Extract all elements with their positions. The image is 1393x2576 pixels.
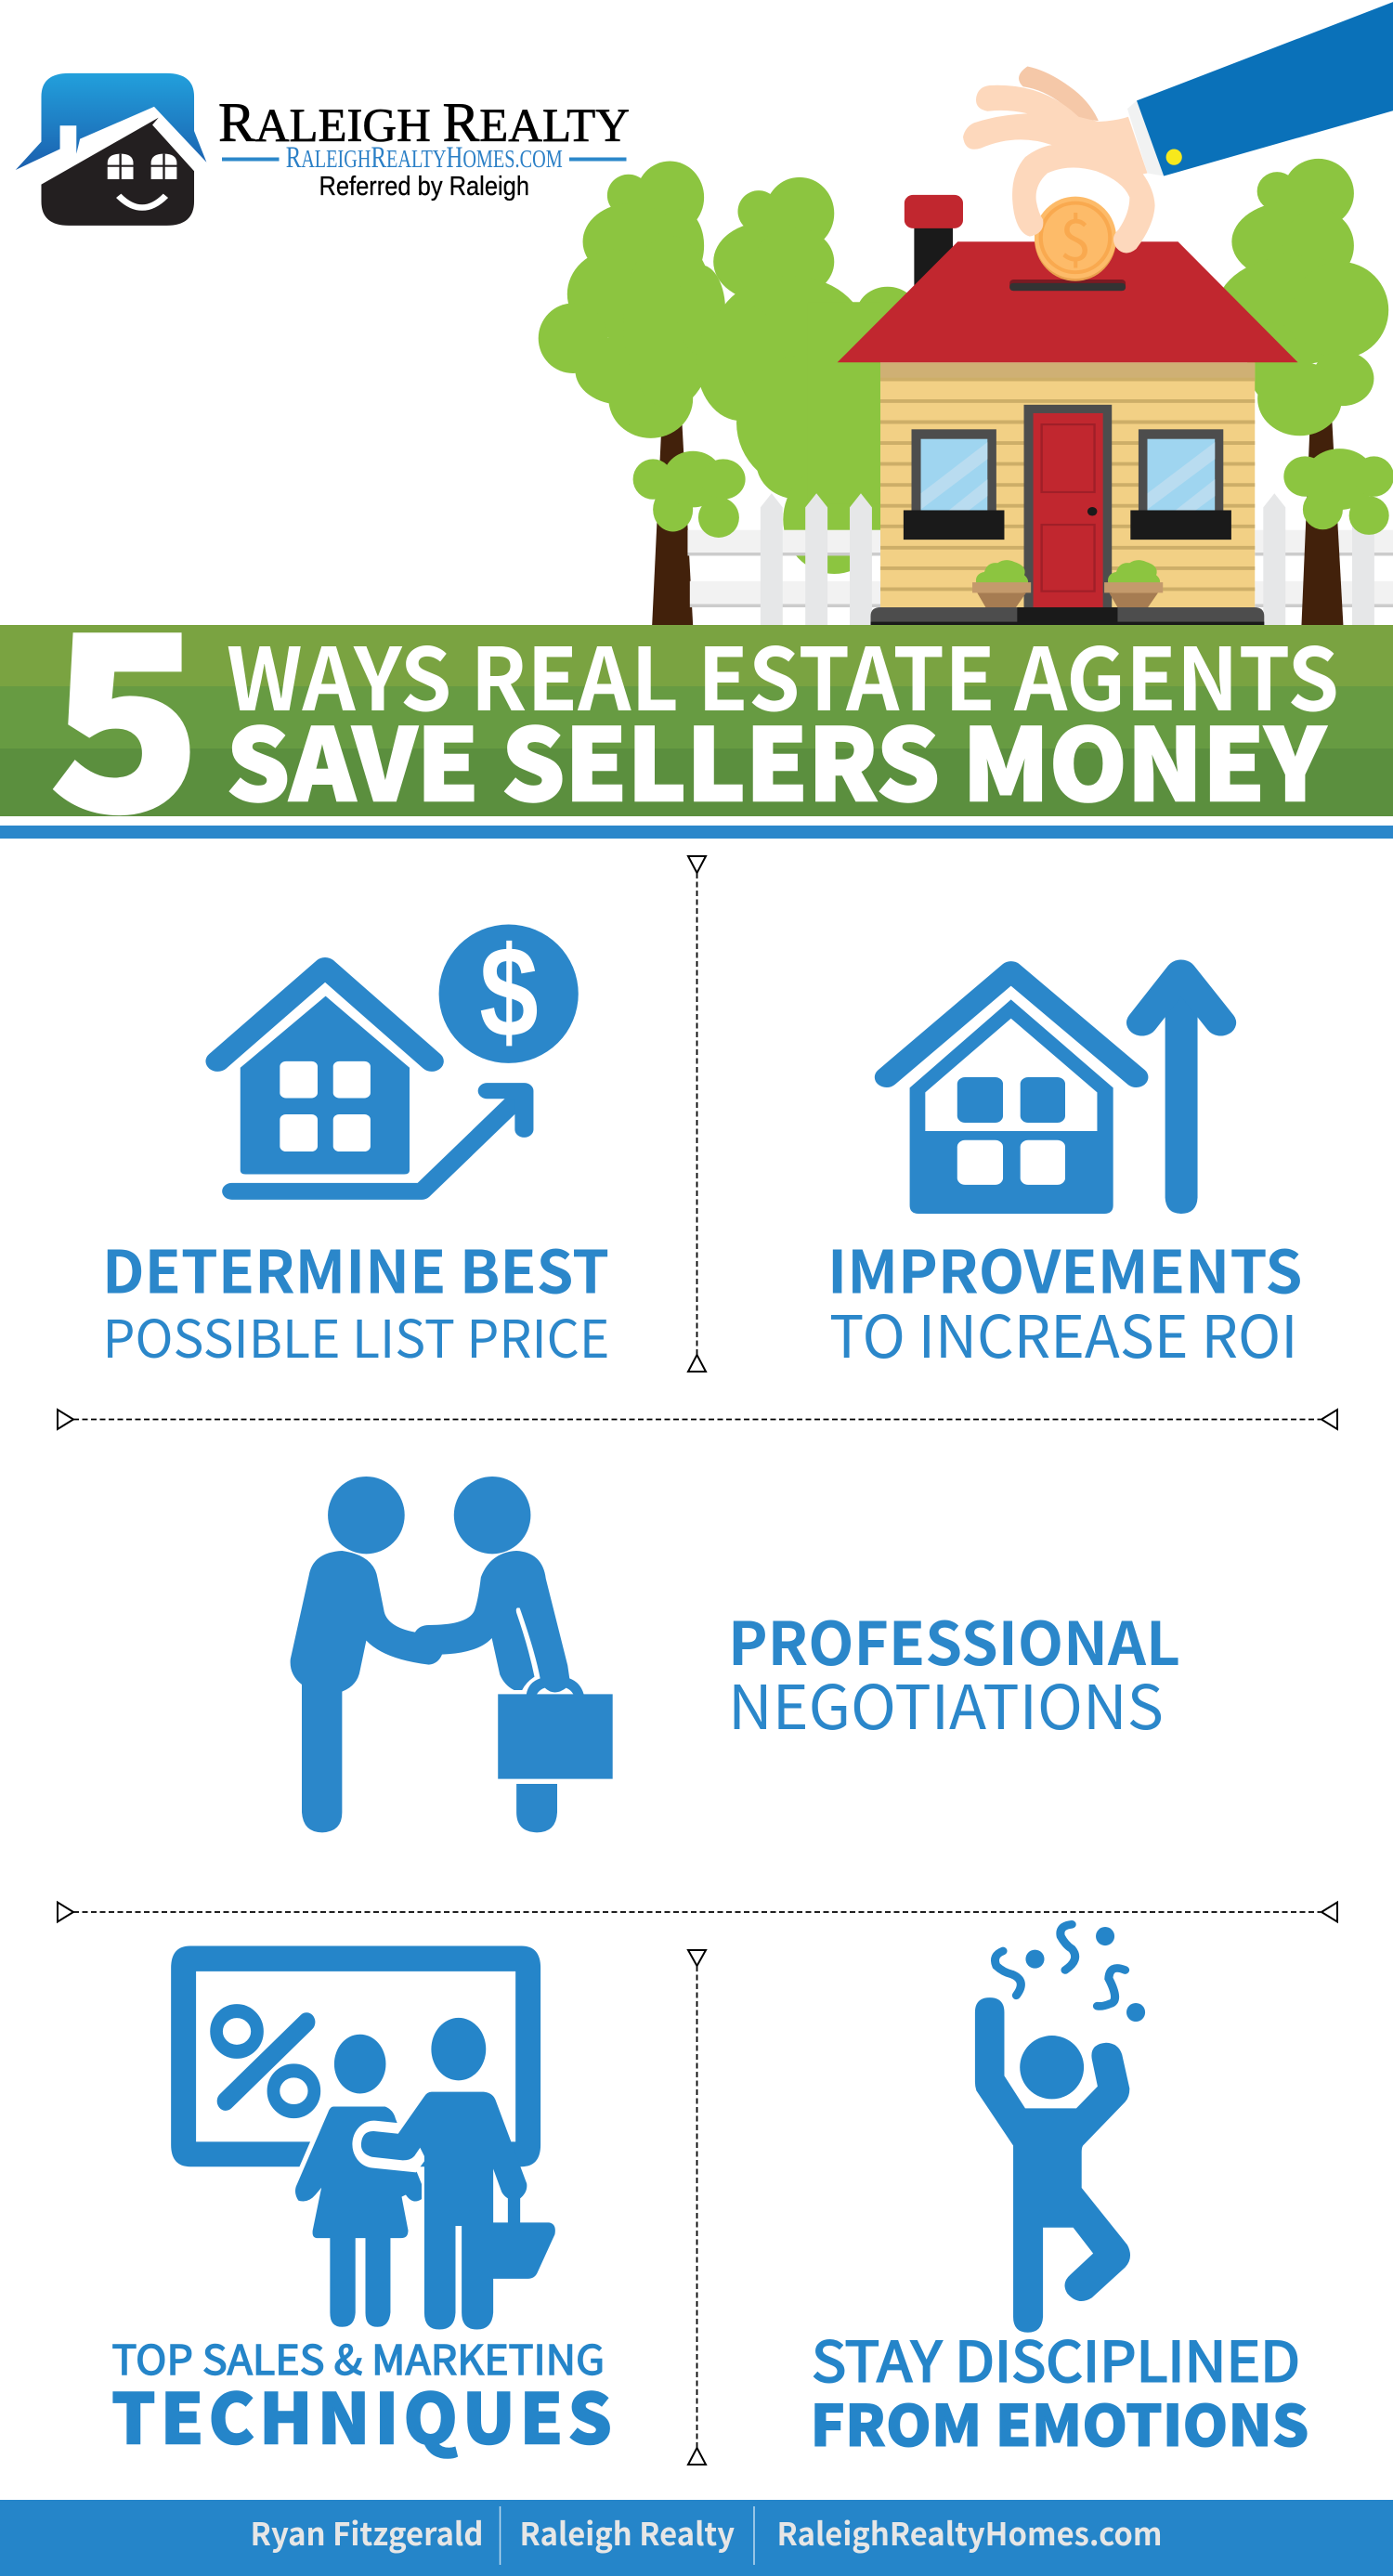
icon: couple in front of percent board xyxy=(171,1946,555,2329)
footer: company: Raleigh Realty xyxy=(520,2509,735,2555)
heading: DETERMINE BEST xyxy=(102,1226,609,1311)
title banner xyxy=(0,529,1393,881)
fence rails and pickets xyxy=(687,493,1393,625)
tree: behind house xyxy=(696,177,918,574)
divider: bottom vertical xyxy=(688,1950,706,2465)
panel: professional negotiations xyxy=(291,1477,1180,1832)
logo tagline: Referred by Raleigh xyxy=(319,172,529,202)
sleeve xyxy=(1127,2,1393,176)
title line 2: SAVE SELLERS MONEY xyxy=(227,685,1326,829)
subheading: TECHNIQUES xyxy=(111,2364,612,2465)
logo icon: smiling house xyxy=(15,72,206,226)
icon: handshake with briefcase xyxy=(290,1477,613,1833)
hero illustration: hand dropping a coin into a house xyxy=(539,2,1393,625)
footer: website: RaleighRealtyHomes.com xyxy=(776,2509,1163,2555)
logo: Raleigh Realty xyxy=(16,73,630,226)
footer: author: Ryan Fitzgerald xyxy=(251,2509,483,2555)
tree: right xyxy=(1217,159,1393,625)
logo website: RALEIGHREALTYHOMES.COM xyxy=(286,141,563,175)
logo wordmark: RALEIGH REALTY xyxy=(218,92,630,153)
house walls xyxy=(880,362,1255,608)
heading: TOP SALES & MARKETING xyxy=(111,2327,605,2387)
divider: horizontal 2 xyxy=(58,1902,1337,1922)
icon: dollar sign: $ xyxy=(479,919,539,1064)
chimney xyxy=(905,195,963,294)
panel: determine best list price xyxy=(102,919,609,1373)
heading: IMPROVEMENTS xyxy=(827,1226,1302,1311)
title line 1: WAYS REAL ESTATE AGENTS xyxy=(227,610,1339,735)
subheading: NEGOTIATIONS xyxy=(728,1659,1164,1747)
panel: top sales and marketing techniques xyxy=(111,1946,612,2465)
divider: top vertical xyxy=(688,856,706,1372)
front step xyxy=(871,607,1264,625)
panel: improvements to increase ROI xyxy=(827,971,1302,1375)
hand xyxy=(963,67,1155,253)
title numeral: 5 xyxy=(48,529,202,881)
divider: horizontal 1 xyxy=(58,1410,1337,1429)
panel: stay disciplined from emotions xyxy=(810,1924,1309,2463)
subheading: FROM EMOTIONS xyxy=(810,2380,1309,2463)
roof xyxy=(838,241,1298,362)
icon: house with up arrow xyxy=(875,960,1237,1214)
planter left xyxy=(972,560,1031,608)
left window xyxy=(904,429,1004,540)
heading: STAY DISCIPLINED xyxy=(812,2318,1300,2398)
coin dollar sign: $ xyxy=(1060,194,1091,278)
subheading: POSSIBLE LIST PRICE xyxy=(102,1298,609,1373)
bush: left xyxy=(633,451,746,538)
icon: house with rising price arrow xyxy=(205,925,579,1200)
planter right xyxy=(1104,560,1163,608)
heading: PROFESSIONAL xyxy=(728,1597,1180,1683)
footer bar xyxy=(0,2500,1393,2576)
subheading: TO INCREASE ROI xyxy=(829,1291,1298,1375)
icon: celebrating figure with confetti xyxy=(975,1920,1146,2333)
coin slot xyxy=(1009,280,1126,291)
door xyxy=(1024,405,1112,608)
blue divider bar xyxy=(0,826,1393,839)
right window xyxy=(1130,429,1231,540)
tree: far left xyxy=(539,161,725,625)
coin xyxy=(1035,197,1116,281)
